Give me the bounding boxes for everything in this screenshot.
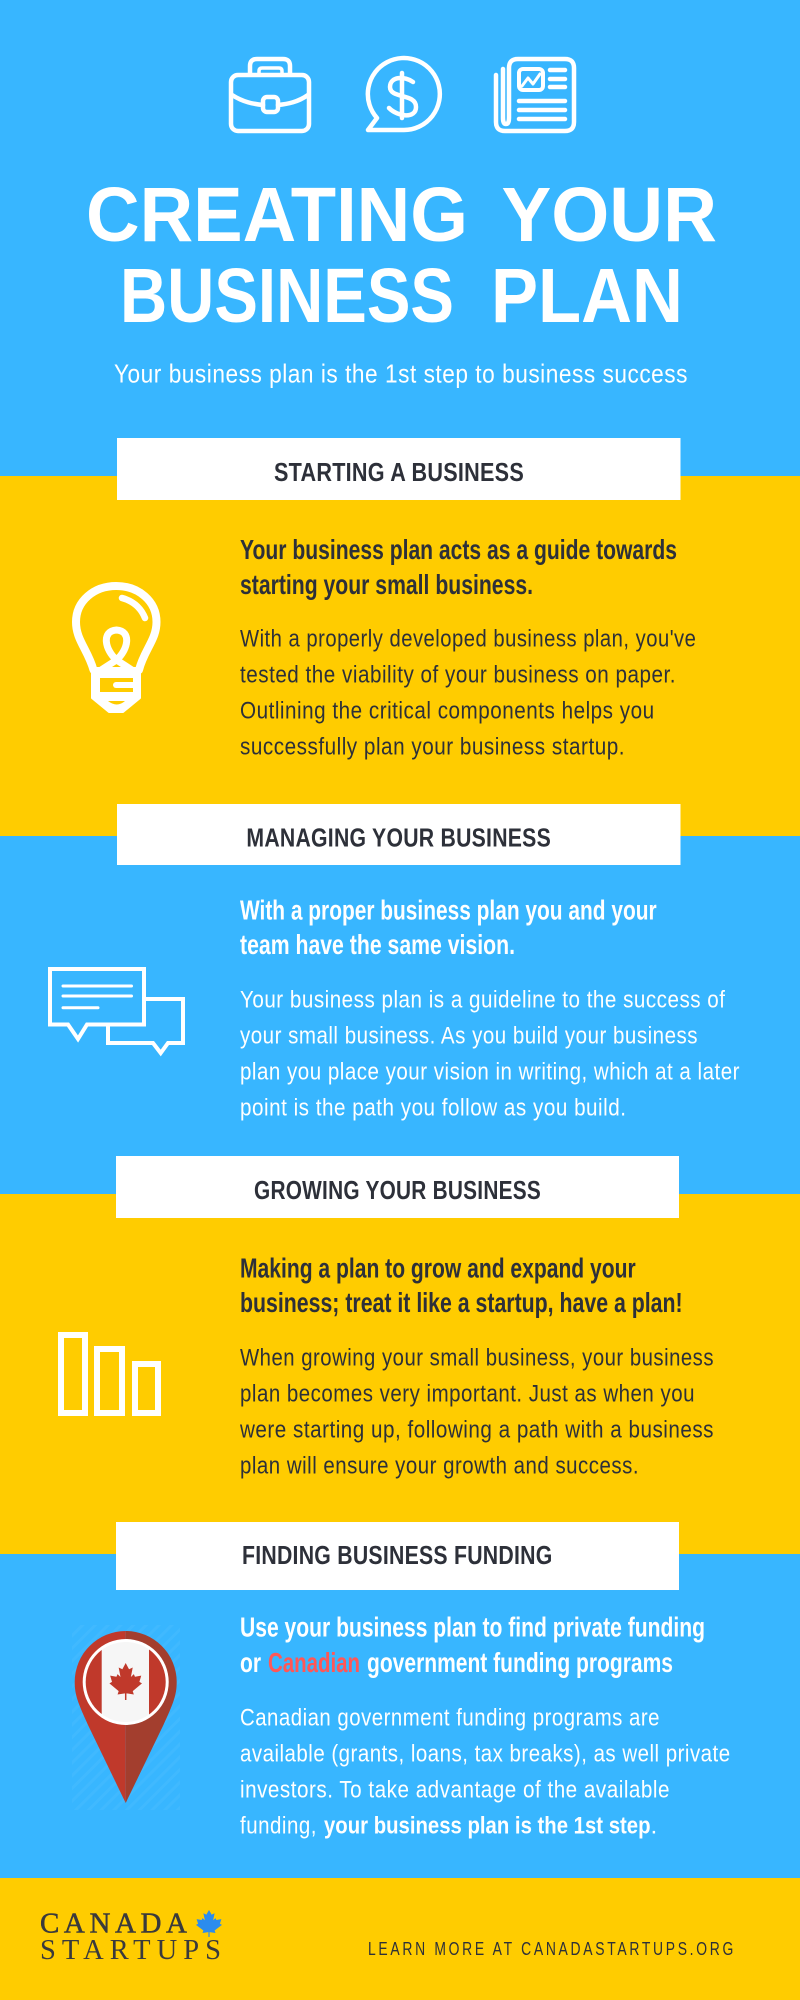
heading bar: managing your business: MANAGING YOUR BUSINESS [246,823,551,853]
body text: successfully plan your business startup. [240,734,625,761]
body text: investors. To take advantage of the available [240,1776,670,1803]
body text [240,1705,731,1839]
subheading: or [240,1647,261,1678]
title: BUSINESS [120,253,454,339]
body text: your small business. As you build your business [240,1022,698,1049]
subheading [240,534,677,600]
body text: Outlining the critical components helps you [240,698,655,725]
title: CREATING [86,172,468,258]
panel: finding business funding [74,1522,730,1838]
body text [239,1345,714,1479]
subheading: With a proper business plan you and your [240,894,657,925]
icon: newspaper [496,59,574,131]
body text: Canadian government funding programs are [240,1705,660,1732]
body text: With a properly developed business plan, you've [240,626,696,653]
subheading: Canadian [268,1647,360,1678]
logo: Canada Startups: STARTUPS [40,1935,221,1966]
heading bar: starting a business: STARTING A BUSINESS [274,457,524,487]
subheading [240,1252,683,1318]
body text: Your business plan is a guideline to the success of [240,986,726,1013]
body text [240,986,740,1121]
panel: footer [0,1878,800,2000]
panel: starting a business [0,438,800,836]
title: YOUR [502,172,717,258]
subheading: team have the same vision. [240,929,515,960]
heading bar: starting a business [117,438,680,500]
panel: managing your business [0,804,800,1194]
subheading: Making a plan to grow and expand your [240,1252,636,1283]
subheading [240,894,657,960]
icon: Canadian map pin [74,1631,177,1803]
body text: When growing your small business, your business [240,1345,714,1372]
subheading: business; treat it like a startup, have a plan! [240,1287,683,1318]
heading bar: growing your business [116,1156,679,1218]
title [86,172,717,339]
body text: plan will ensure your growth and success. [240,1452,639,1479]
body text: funding, [240,1812,317,1839]
subheading: starting your small business. [240,569,533,600]
icon: dollar speech bubble [368,58,440,130]
logo: Canada Startups [40,1908,222,1966]
body text: were starting up, following a path with a business [239,1417,714,1444]
panel: header [0,0,800,476]
icon: chat bubbles [50,969,183,1053]
subheading [240,1612,705,1678]
subheading: government funding programs [367,1647,673,1678]
icon: light bulb [76,586,156,712]
title: PLAN [491,253,683,339]
body text: plan becomes very important. Just as when you [240,1381,695,1408]
panel: growing your business [0,1156,800,1554]
heading bar: finding business funding: FINDING BUSINESS FUNDING [242,1540,552,1570]
body text: your business plan is the 1st step [324,1812,650,1839]
icon: briefcase [231,59,309,131]
heading bar: managing your business [117,804,680,865]
body text: tested the viability of your business on paper. [240,662,676,689]
heading bar: growing your business: GROWING YOUR BUSINESS [254,1175,541,1205]
logo: Canada Startups: CANADA [40,1908,187,1940]
body text: point is the path you follow as you build. [240,1094,626,1121]
heading bar: finding business funding [116,1522,679,1590]
subheading: Your business plan acts as a guide towards [240,534,677,565]
body text [240,626,696,761]
icon: bar chart [61,1335,158,1413]
subtitle: Your business plan is the 1st step to business success [114,359,688,389]
body text: . [650,1812,658,1839]
